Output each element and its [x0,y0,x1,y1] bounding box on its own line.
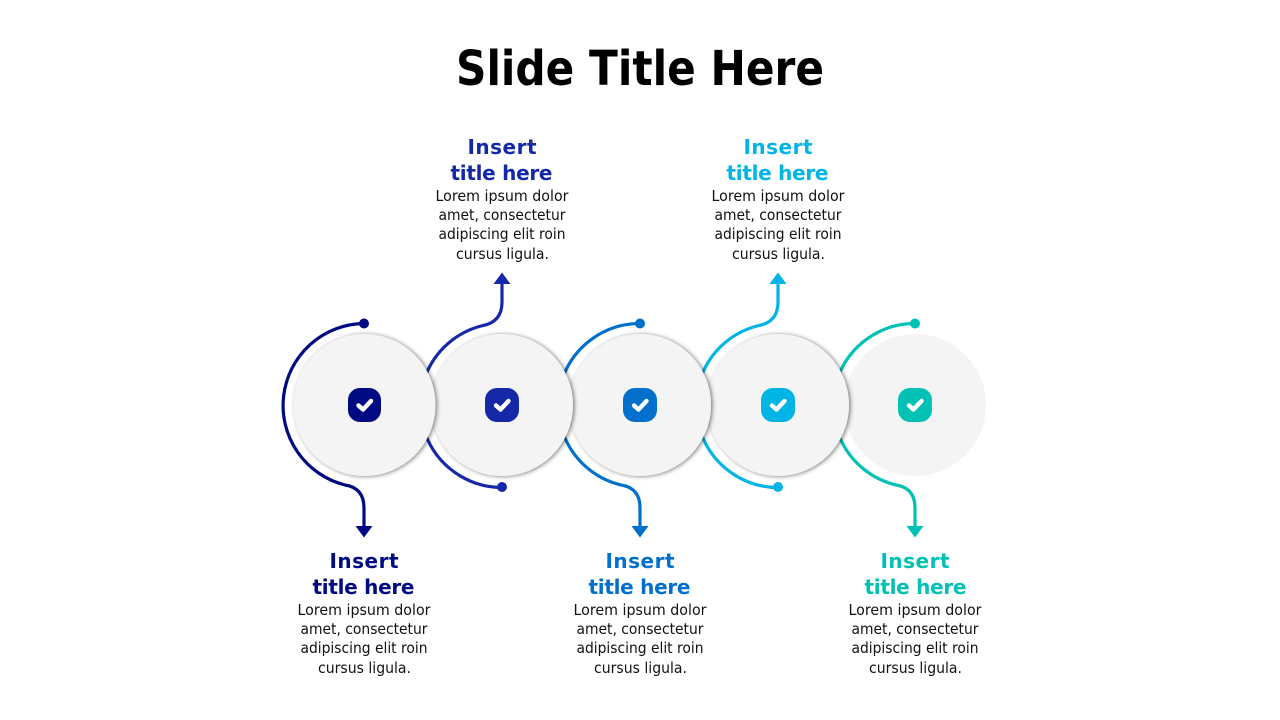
step 1 start dot [359,318,369,328]
step 4 body: amet, consectetur [714,206,842,224]
step 5 heading: title here [864,575,966,599]
title: Slide Title Here [456,41,824,97]
step 2 circle [431,334,573,476]
step 4 heading: title here [726,161,828,185]
step 3 heading: title here [588,575,690,599]
icon: check 3 [623,388,657,422]
step 3 connector [563,318,648,538]
step 4 body: Lorem ipsum dolor [712,187,845,205]
step 5 body: amet, consectetur [852,620,979,638]
step 1 circle [294,334,436,476]
step 2 arrowhead [494,272,510,284]
step 2 body: amet, consectetur [438,206,566,224]
step 5 circle [844,334,986,476]
step 1 body: amet, consectetur [300,620,428,638]
step 3 body: Lorem ipsum dolor [574,601,707,619]
icon: check 2 [485,388,519,422]
step 4 end dot [773,482,783,492]
step 1 body: adipiscing elit roin [300,639,428,657]
step 1 arrowhead [356,526,372,538]
step 2 body: adipiscing elit roin [438,225,566,243]
step 4 connector [701,272,786,492]
text block: step 2 [436,135,569,263]
step 4 circle [707,334,849,476]
step 3 body: amet, consectetur [576,620,704,638]
step 3 start dot [635,318,645,328]
step 2 body: Lorem ipsum dolor [436,187,569,205]
step 3 heading: Insert [606,549,675,573]
icon: check 1 [348,388,381,422]
step 5 body: adipiscing elit roin [852,639,978,657]
step 1 body: cursus ligula. [318,659,411,677]
icon: check 5 [898,388,932,422]
step 2 connector [425,272,510,492]
step 2 heading: Insert [468,135,537,159]
step 3 body: adipiscing elit roin [576,639,704,657]
step 5 arrowhead [906,526,924,538]
icon: check 4 [761,388,795,422]
step 4 heading: Insert [744,135,813,159]
text block: step 5 [848,549,982,677]
step 4 body: cursus ligula. [732,245,825,263]
step 3 circle [569,334,711,476]
text block: step 1 [298,549,431,677]
step 5 body: Lorem ipsum dolor [848,601,982,619]
step 1 connector [283,318,372,538]
step 3 body: cursus ligula. [594,659,687,677]
text block: step 4 [712,135,845,263]
step 1 body: Lorem ipsum dolor [298,601,431,619]
step 1 heading: Insert [330,549,399,573]
step 4 arrowhead [770,272,786,284]
step 1 heading: title here [312,575,414,599]
step 4 body: adipiscing elit roin [714,225,842,243]
step 5 connector [838,318,924,538]
step 5 heading: Insert [880,549,950,573]
step 3 arrowhead [632,526,648,538]
text block: step 3 [574,549,707,677]
step 5 body: cursus ligula. [869,659,962,677]
step 5 start dot [910,318,920,328]
step 2 body: cursus ligula. [456,245,549,263]
step 2 end dot [497,482,507,492]
step 2 heading: title here [450,161,552,185]
